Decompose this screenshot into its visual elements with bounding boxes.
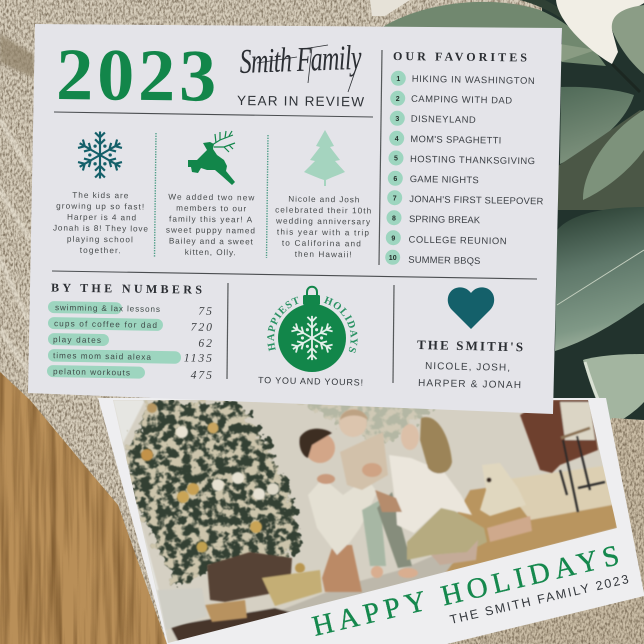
heading: year 2023: 2023 (56, 34, 217, 118)
item 6 (388, 171, 479, 186)
column 2: pets (166, 131, 256, 257)
panel: the smith's (417, 287, 523, 391)
people (299, 409, 532, 592)
arc text: holidays: HOLIDAYS (324, 296, 358, 353)
bar: pelaton: pelaton workouts (53, 367, 130, 377)
panel: ornament (258, 286, 363, 388)
vertical rule (393, 285, 394, 383)
signature: the smith family 2023: THE SMITH FAMILY 2023 (449, 572, 630, 627)
item 6: 6 (393, 176, 397, 183)
icon: reindeer (188, 131, 235, 185)
story text: kids (53, 191, 149, 256)
item 2: 2 (396, 96, 400, 103)
item 7: 7 (393, 195, 397, 202)
icon: pine tree (304, 130, 345, 186)
rule (52, 271, 537, 279)
divider dotted 2 (266, 135, 268, 258)
item 1: 1 (396, 76, 400, 83)
item 7: JONAH'S FIRST SLEEPOVER (409, 193, 544, 206)
item 8: 8 (392, 215, 396, 222)
bar: coffee (48, 317, 214, 334)
item 9 (386, 230, 507, 246)
story text: pets (166, 193, 256, 257)
item 8 (386, 210, 481, 225)
item 4: 4 (395, 136, 399, 143)
heading: smith family script: Smith Family (239, 38, 363, 81)
names line 1: NICOLE, JOSH, (425, 361, 510, 374)
item 6: GAME NIGHTS (410, 173, 479, 185)
icon: ornament ball (278, 304, 346, 372)
story text: pets: We added two new (168, 193, 254, 202)
names line 2: HARPER & JONAH (418, 378, 521, 391)
story text: kids: together. (80, 246, 121, 255)
item 9: COLLEGE REUNION (408, 234, 507, 246)
bar: pelaton: 475 (191, 370, 214, 382)
item 5: HOSTING THANKSGIVING (410, 153, 535, 166)
column 3: anniversary (275, 130, 372, 260)
heading: year in review: YEAR IN REVIEW (237, 93, 364, 109)
story text: pets: sweet puppy named (166, 226, 255, 235)
item 1: HIKING IN WASHINGTON (412, 73, 535, 86)
story text: kids: Harper is 4 and (67, 213, 137, 222)
story text: anniversary: celebrated their 10th (275, 205, 372, 216)
bar: play dates: 62 (198, 338, 214, 350)
caption: to you and yours: TO YOU AND YOURS! (258, 375, 363, 388)
panel: our favorites (385, 49, 544, 266)
item 3: DISNEYLAND (411, 113, 476, 125)
icon: snowflake (77, 131, 123, 179)
background: foliage and flower (372, 0, 644, 426)
background: wooden table (0, 372, 167, 644)
bar: coffee: 720 (191, 321, 214, 334)
arc text: happiest: HAPPIEST (267, 296, 299, 352)
story text: pets: Bailey and a sweet (169, 237, 254, 246)
bar: swimming: 75 (198, 306, 214, 318)
vertical rule (227, 283, 228, 379)
story text: kids: growing up so fast! (56, 202, 144, 211)
story text: pets: members to our (176, 204, 246, 213)
item 9: 9 (391, 235, 395, 242)
item 3 (390, 111, 476, 126)
rule (54, 112, 373, 117)
item 8: SPRING BREAK (409, 213, 481, 225)
item 10 (385, 250, 480, 266)
chair and table (520, 400, 605, 512)
photo postcard (98, 395, 644, 644)
icon: heart (448, 287, 494, 329)
item 4 (389, 131, 501, 146)
icon: ornament cap (303, 295, 320, 305)
christmas tree (127, 402, 302, 590)
story text: anniversary (275, 194, 372, 260)
family photo (100, 395, 630, 644)
bar: swimming: swimming & lax lessons (55, 303, 160, 314)
story text: anniversary: Nicole and Josh (288, 195, 360, 204)
story text: pets: family this year! A (169, 215, 253, 224)
bar: coffee: cups of coffee for dad (54, 319, 157, 330)
item 4: MOM'S SPAGHETTI (410, 133, 501, 146)
divider dotted 1 (154, 133, 156, 257)
headline: happy holidays: HAPPY HOLIDAYS (309, 539, 622, 643)
story text: anniversary: this year with a trip (277, 228, 369, 237)
item 3: 3 (395, 116, 399, 123)
postcard paper (98, 398, 644, 644)
story text: kids: playing school (67, 235, 133, 244)
item 5: 5 (394, 156, 398, 163)
item 10: SUMMER BBQS (408, 254, 480, 266)
card paper (28, 24, 562, 414)
main card (28, 24, 562, 414)
name: the smith's: THE SMITH'S (417, 337, 523, 354)
icon: ornament snowflake (291, 316, 333, 360)
bar: alexa (48, 349, 214, 365)
heading: by the numbers: BY THE NUMBERS (51, 281, 202, 297)
story text: anniversary: then Hawaii! (295, 250, 352, 259)
story text: kids: The kids are (72, 191, 129, 200)
bar: alexa: times mom said alexa (53, 351, 151, 362)
background: linen under postcard right (430, 418, 644, 644)
icon: ornament hook (307, 287, 317, 300)
vertical rule (379, 50, 382, 265)
story text: anniversary: to Califorina and (282, 239, 361, 248)
story text: kids: Jonah is 8! They love (53, 224, 148, 234)
story text: pets: kitten, Olly. (185, 248, 236, 257)
item 2: CAMPING WITH DAD (411, 93, 512, 106)
bar: alexa: 1135 (184, 352, 214, 365)
bar: swimming (48, 301, 214, 318)
bar: play dates: play dates (53, 335, 101, 345)
column 1: kids (53, 131, 149, 256)
basket and gifts (157, 552, 322, 630)
item 10: 10 (389, 255, 397, 262)
heading: our favorites: OUR FAVORITES (393, 49, 527, 64)
panel: by the numbers (47, 281, 214, 382)
bar: pelaton (47, 365, 214, 382)
bar: play dates (48, 333, 214, 350)
dog (480, 463, 526, 516)
story text: anniversary: wedding anniversary (275, 216, 371, 227)
